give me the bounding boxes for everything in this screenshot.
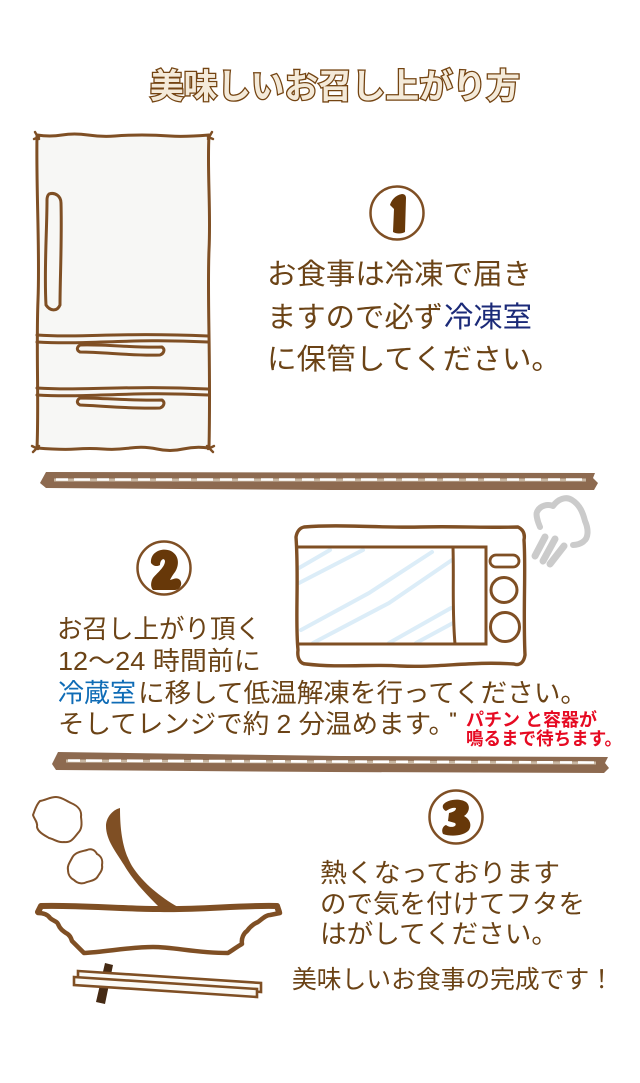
highlight: refrigerator room: 冷蔵室 [58,678,136,708]
closing message: 美味しいお食事の完成です！ [292,966,614,994]
step 1 text [267,258,561,376]
microwave window reflections [299,550,453,643]
fridge drawer lines [37,335,208,396]
bowl body [38,913,280,953]
step 2 text: 12～24 時間前に [58,646,261,676]
step 1 number [370,186,424,240]
step 2 text [57,614,587,739]
step 1 text: に保管してください。 [267,343,561,376]
step 2 number [138,542,190,594]
step 2 text: " [449,709,457,728]
icon: microwave [296,526,525,666]
icon: refrigerator [32,132,214,452]
step 3 text [320,858,585,949]
drawer handles [77,345,164,408]
icon: steam from microwave [535,498,588,564]
highlight: freezer: 冷凍室 [444,301,532,334]
red note: パチン と容器が [466,709,597,730]
bowl rim [38,906,279,912]
step 2 text: そしてレンジで約 2 分温めます。 [58,709,455,739]
icon: steam puffs [33,797,102,883]
fridge door handle [45,193,61,310]
microwave buttons [490,555,520,642]
red note: 鳴るまで待ちます。 [466,729,622,749]
red note [466,709,622,749]
step 2 text: に移して低温解凍を行ってください。 [138,678,587,708]
title: 美味しいお召し上がり方 [150,67,520,106]
icon: bowl with peeled lid [38,808,280,953]
divider 2 [52,752,609,773]
step 1 text: お食事は冷凍で届き [267,258,532,291]
lid film [106,808,178,907]
step 3 text: はがしてください。 [320,919,558,949]
step 1 text: ますので必ず [267,301,443,334]
icon: chopsticks [74,963,261,1004]
divider 1 [40,472,598,490]
step 3 number [430,790,482,844]
step 2 text: お召し上がり頂く [57,614,261,644]
step 3 text: 熱くなっております [320,858,560,888]
step 3 text: ので気を付けてフタを [320,889,585,919]
